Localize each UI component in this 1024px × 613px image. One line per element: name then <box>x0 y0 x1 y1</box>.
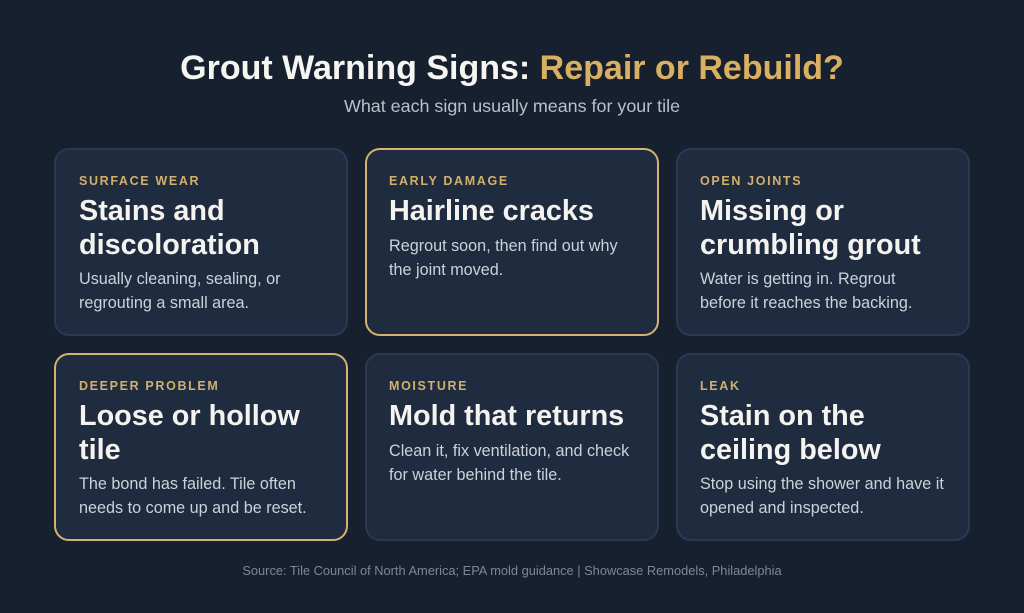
heading: hairline cracks: Hairline cracks <box>389 195 594 227</box>
heading: missing or crumbling grout: Missing or <box>700 195 844 227</box>
heading: loose or hollow tile: tile <box>79 434 121 466</box>
panel: stains and discoloration <box>54 148 348 336</box>
label: moisture: MOISTURE <box>389 379 468 393</box>
heading: loose or hollow tile: Loose or hollow <box>79 400 300 432</box>
label: open joints: OPEN JOINTS <box>700 174 802 188</box>
text: stains explanation: Usually cleaning, sealing, or <box>79 270 281 288</box>
text: cracks explanation <box>389 237 618 279</box>
text: mold explanation: Clean it, fix ventilation, and check <box>389 442 629 460</box>
text: cracks explanation: the joint moved. <box>389 261 503 279</box>
panel: loose or hollow tile <box>54 353 348 541</box>
panel: mold that returns <box>365 353 659 541</box>
text: ceiling stain explanation: opened and inspected. <box>700 499 864 517</box>
text: mold explanation: for water behind the tile. <box>389 466 562 484</box>
heading: mold that returns: Mold that returns <box>389 400 624 432</box>
heading: missing or crumbling grout <box>700 195 921 261</box>
heading: loose or hollow tile <box>79 400 300 466</box>
panel: stain on the ceiling below <box>676 353 970 541</box>
title: Grout Warning Signs: Repair or Rebuild? <box>180 49 844 87</box>
heading: stains and discoloration <box>79 195 260 261</box>
text: mold explanation <box>389 442 630 484</box>
panel: hairline cracks <box>365 148 659 336</box>
heading: stain on the ceiling below <box>700 400 881 466</box>
heading: stains and discoloration: Stains and <box>79 195 225 227</box>
text: missing grout explanation <box>700 270 912 312</box>
heading: missing or crumbling grout: crumbling grout <box>700 229 921 261</box>
text: missing grout explanation: Water is getting in. Regrout <box>700 270 896 288</box>
text: stains explanation <box>79 270 281 312</box>
text: ceiling stain explanation <box>700 475 944 517</box>
label: deeper problem: DEEPER PROBLEM <box>79 379 219 393</box>
heading: stain on the ceiling below: Stain on the <box>700 400 865 432</box>
text: missing grout explanation: before it reaches the backing. <box>700 294 912 312</box>
text: ceiling stain explanation: Stop using the shower and have it <box>700 475 944 493</box>
panel: missing or crumbling grout <box>676 148 970 336</box>
label: early damage: EARLY DAMAGE <box>389 174 509 188</box>
heading: stain on the ceiling below: ceiling below <box>700 434 881 466</box>
text: stains explanation: regrouting a small area. <box>79 294 249 312</box>
source line: Source: Tile Council of North America; EPA mold guidance | Showcase Remodels, Philadelphia <box>242 563 782 578</box>
text: loose tile explanation: needs to come up and be reset. <box>79 499 307 517</box>
heading: stains and discoloration: discoloration <box>79 229 260 261</box>
subtitle: What each sign usually means for your tile <box>344 96 680 116</box>
label: surface wear: SURFACE WEAR <box>79 174 200 188</box>
text: loose tile explanation: The bond has failed. Tile often <box>79 475 296 493</box>
label: leak: LEAK <box>700 379 741 393</box>
text: loose tile explanation <box>79 475 307 517</box>
text: cracks explanation: Regrout soon, then find out why <box>389 237 618 255</box>
